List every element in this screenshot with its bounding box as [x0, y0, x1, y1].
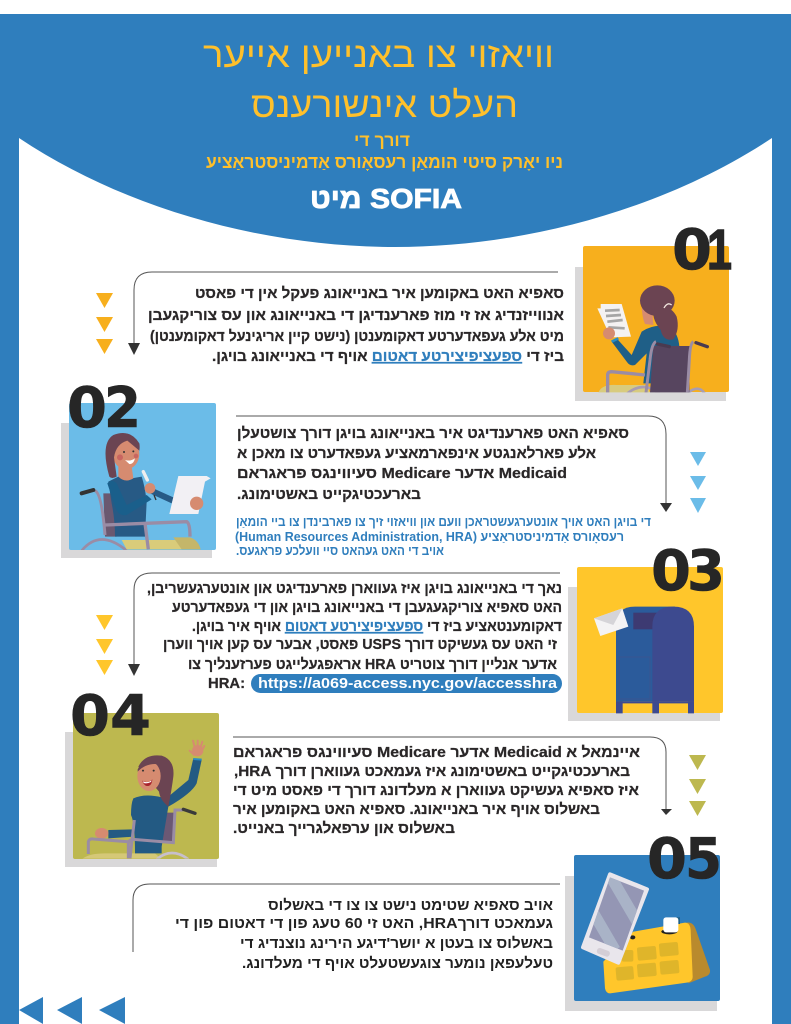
connector arrow 4 [233, 737, 672, 815]
step 5 text [175, 897, 553, 972]
number 03 [651, 539, 725, 604]
illustration 5: phone and calendar [565, 827, 722, 1011]
step 2 text: אלע פארלאנגטע אינפארמאציע געפאדערט צו מאכן א [237, 445, 596, 462]
url pill: https://a069-access.nyc.gov/accesshra [258, 675, 558, 692]
panel: step 5 [133, 827, 722, 1011]
step 4 text: בארעכטיגקייט באשטימונג איז געמאכט געווארן דורך HRA, [234, 763, 630, 780]
step 4 text: באשלוס אויף איר באנייאונג. סאפיא האט באקומען איר [233, 801, 600, 818]
subtitle [206, 131, 563, 172]
icon: blue triangles 2 [690, 452, 706, 513]
number 02 [67, 376, 141, 441]
step 1 text [148, 285, 564, 365]
number 01: 1 [707, 218, 732, 282]
panel: step 3 [96, 539, 725, 721]
panel: step 2 [61, 376, 706, 558]
title: וויאזוי צו באנייען אייער [203, 34, 554, 75]
panel: step 4 [65, 684, 706, 867]
step 3 text [147, 580, 562, 692]
step 3 text: HRA: [208, 675, 245, 692]
number 05: 5 [685, 827, 722, 892]
step 3 text: אדער אנליין דורך צוטריט HRA אראפגעלייגט פערזענליך צו [188, 656, 557, 673]
number 04: 0 [70, 684, 110, 749]
byline: with Sofia: SOFIA מיט [310, 183, 462, 214]
step 2 text: בארעכטיגקייט באשטימונג. [237, 486, 421, 503]
step 4 text: באשלוס און ערפאלגרייך באנייט. [233, 820, 455, 837]
step 2 note: די בויגן האט אויך אונטערגעשטראכן וועם און וויאזוי זיך צו פארבינדן צו ביי הומאַן [236, 514, 651, 529]
step 1 text: אנווייזנדיג אז זי מוז פארענדיגן די באנייאונג און עס צוריקגעבן [148, 307, 564, 324]
title: העלט אינשורענס [251, 84, 518, 125]
icon: bottom left-pointing arrows [19, 997, 125, 1024]
step 1 text: סאפיא האט באקומען איר באנייאונג פעקל אין די פאסט [195, 285, 564, 302]
step 2 note: רעסאָורס אַדמיניסטראַציע (Human Resources Administration, HRA) [235, 529, 624, 544]
illustration 2: woman signing form [61, 376, 216, 558]
number 01 [672, 218, 732, 283]
illustration 3: mailbox [568, 539, 725, 721]
step 5 text: באשלוס צו בעטן א יושר'דיגע הירינג נוצנדיג די [240, 935, 553, 952]
connector arrow 1 [128, 272, 558, 355]
step 2 text: Medicaid אדער Medicare סעיווינגס פראגראם [237, 465, 567, 482]
number 02: 2 [104, 376, 141, 441]
panel: step 1 [96, 218, 732, 401]
step 3 text: נאך די באנייאונג בויגן איז געווארן פארענדיגט און אונטערגעשריבן, [147, 580, 562, 597]
step 3 text: האט סאפיא צוריקגעגעבן די באנייאונג בויגן און די געפאדערטע [172, 599, 562, 616]
connector line 5 [133, 884, 560, 952]
number 03: 3 [687, 539, 725, 604]
step 4 text: איז סאפיא געשיקט געווארן א מעלדונג דורך די פאסט מיט די [233, 782, 639, 799]
connector arrow 2 [236, 416, 672, 512]
subtitle: דורך די [354, 131, 410, 150]
number 04: 4 [110, 684, 151, 749]
step 1 text: ביז די ספעציפיצירטע דאטום אויף די באנייאונג בויגן. [212, 348, 564, 365]
step 2 note: אויב די האט געהאט סיי וועלכע פראגעס. [236, 543, 444, 558]
connector arrow 3 [128, 573, 560, 676]
illustration 4: woman waving [65, 684, 219, 867]
step 4 text: איינמאל א Medicaid אדער Medicare סעיווינגס פראגראם [233, 744, 640, 761]
number 05: 0 [647, 827, 687, 892]
number 02: 0 [67, 376, 107, 441]
icon: yellow triangles 3 [96, 615, 113, 675]
step 2 text: סאפיא האט פארענדיגט איר באנייאונג בויגן דורך צושטעלן [237, 425, 629, 442]
subtitle: ניו יאָרק סיטי הומאַן רעסאָורס אַדמיניסטראַציע [206, 152, 563, 172]
step 5 text: טעלעפאן נומער צוגעשטעלט אויף די מעלדונג. [242, 955, 553, 972]
step 3 text: זי האט עס געשיקט דורך USPS פאסט, אבער עס קען אויך ווערן [163, 636, 557, 653]
number 01: 0 [672, 218, 712, 283]
icon: olive triangles 4 [689, 755, 706, 816]
step 5 text: אויב סאפיא שטימט נישט צו צו די באשלוס [268, 897, 553, 914]
icon: yellow triangles 1 [96, 293, 113, 354]
step 4 text [233, 744, 640, 837]
step 2 text [237, 425, 629, 503]
number 03: 0 [651, 539, 691, 604]
illustration 1: woman reading [575, 218, 732, 401]
step 2 note [235, 514, 651, 558]
title [203, 34, 554, 125]
step 5 text: געמאכט דורךHRA, האט זי 60 טעג פון די דאטום פון די [175, 915, 553, 932]
header [203, 34, 563, 214]
number 04 [70, 684, 151, 749]
number 05 [647, 827, 722, 892]
step 1 text: מיט אלע געפאדערטע דאקומענטן (נישט קיין אריגינעל דאקומענטן) [150, 328, 564, 345]
step 3 text: דאקומענטאציע ביז די ספעציפיצירטע דאטום אויף איר בויגן. [192, 618, 562, 635]
